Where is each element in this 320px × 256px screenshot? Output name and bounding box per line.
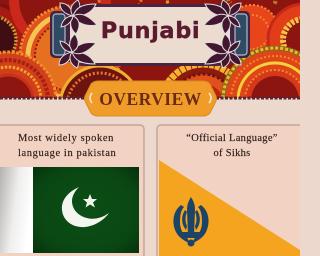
overview badge: [84, 81, 216, 116]
panel: right: [157, 125, 307, 256]
left caption: language in pakistan: [18, 148, 116, 159]
Pakistan flag: [0, 167, 139, 253]
icon: flower bottom left: [59, 34, 96, 68]
title plaque: [50, 0, 250, 68]
lower page background: [0, 98, 300, 256]
icon: flower top right: [204, 0, 241, 34]
icon: flower bottom right: [204, 34, 241, 68]
icon: khanda: [173, 197, 209, 246]
right caption: “Official Language”: [186, 133, 278, 144]
panel: left: [0, 125, 144, 256]
patterned header background: [0, 0, 320, 152]
title text: Punjabi: [101, 18, 200, 44]
icon: star: [83, 194, 97, 208]
dotted header edge: [0, 96, 300, 100]
icon: crescent: [62, 187, 109, 227]
Sikh flag: [159, 160, 300, 256]
icon: flower top left: [60, 0, 97, 34]
left caption: Most widely spoken: [18, 133, 114, 144]
overview text: OVERVIEW: [99, 89, 202, 109]
right caption: of Sikhs: [213, 148, 251, 159]
